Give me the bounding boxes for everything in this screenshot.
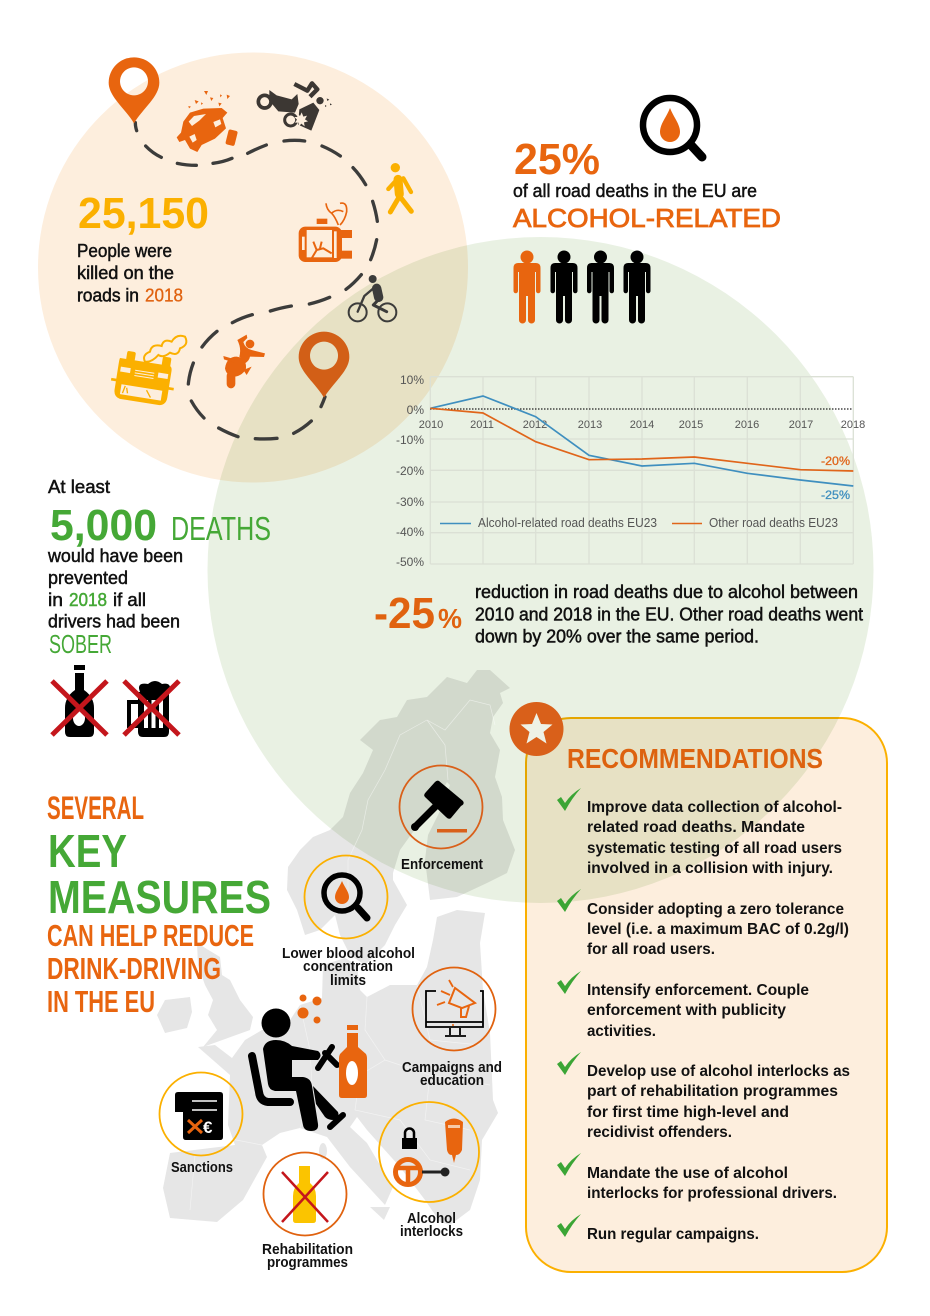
stat: -25% reduction: reduction in road deaths due to alcohol between xyxy=(475,582,858,602)
icon: steering wheel and key xyxy=(396,1160,450,1184)
measure: alcohol interlocks: Alcohol xyxy=(407,1211,456,1227)
line chart: road death trends 2010-2018: -25% xyxy=(821,488,850,502)
y axis labels: -40% xyxy=(396,525,424,539)
icon: crashed car xyxy=(177,91,238,152)
icon: monitor with megaphone xyxy=(426,980,483,1036)
measure: alcohol interlocks: interlocks xyxy=(400,1224,463,1240)
measure: campaigns and education: education xyxy=(420,1073,484,1089)
end pin xyxy=(299,332,349,398)
map borders xyxy=(190,700,495,1210)
zero line xyxy=(430,408,853,410)
smoke xyxy=(144,336,186,362)
x axis labels: 2015 xyxy=(679,419,703,431)
item: data collection: related road deaths. Mandate xyxy=(587,819,805,836)
icon: crossed-out beer mug xyxy=(124,681,179,737)
item: campaigns: Run regular campaigns. xyxy=(587,1226,759,1243)
stat: 5,000 deaths preventable: would have been xyxy=(47,545,183,566)
item: zero tolerance: level (i.e. a maximum BAC of 0.2g/l) xyxy=(587,921,849,938)
stat: 25,150 killed: 2018 xyxy=(145,286,183,306)
measure: campaigns and education xyxy=(402,968,502,1089)
stat: -25% reduction: down by 20% over the same period. xyxy=(475,626,759,646)
stat: 5,000 deaths preventable: in xyxy=(48,589,63,610)
measure: lower blood alcohol limits: concentration xyxy=(303,959,393,975)
icon: crashed motorcycle xyxy=(258,83,332,131)
x axis labels: 2018 xyxy=(841,419,865,431)
y axis labels: 10% xyxy=(400,373,424,387)
stat: 25,150 killed: 25,150 xyxy=(78,189,209,238)
stat: 25% alcohol-related xyxy=(513,135,781,233)
icon: overturned car with smoke xyxy=(108,349,178,407)
icon: magnifier with drop xyxy=(324,875,367,918)
stat: -25% reduction: -25 xyxy=(374,589,435,638)
bubbles xyxy=(298,994,322,1024)
icon: crossed-out yellow bottle xyxy=(282,1166,328,1223)
bottle xyxy=(339,1025,367,1098)
icon: overturned van xyxy=(299,203,352,262)
icon: cyclist xyxy=(349,275,396,321)
y axis labels: -10% xyxy=(396,433,424,447)
item: professional drivers: interlocks for professional drivers. xyxy=(587,1185,837,1202)
measure: rehabilitation programmes xyxy=(262,1152,353,1271)
legend xyxy=(440,516,838,530)
stat: -25% reduction: 2010 and 2018 in the EU. Other road deaths went xyxy=(475,604,863,624)
measure: lower blood alcohol limits: limits xyxy=(330,973,366,989)
measure: lower blood alcohol limits xyxy=(282,856,415,989)
stat: 5,000 deaths preventable: prevented xyxy=(48,567,128,588)
stat: 5,000 deaths preventable: At least xyxy=(48,476,110,497)
icon: gavel xyxy=(411,781,467,832)
x axis labels: 2013 xyxy=(578,419,602,431)
heading: several key measures: SEVERAL xyxy=(47,790,144,826)
item: enforcement: Intensify enforcement. Couple xyxy=(587,982,809,999)
stat: 5,000 deaths preventable: if all xyxy=(113,589,146,610)
background circle: alcohol-related xyxy=(208,237,874,903)
icon: magnifier with drop xyxy=(643,98,702,157)
heading: several key measures xyxy=(47,790,271,1019)
item: campaigns xyxy=(557,1214,759,1243)
panel: recommendations xyxy=(510,702,887,1272)
measure: sanctions xyxy=(160,1072,242,1176)
item: enforcement xyxy=(557,971,809,1040)
stat: 25,150 killed: People were xyxy=(77,241,172,261)
x axis labels: 2017 xyxy=(789,419,813,431)
stat: 25% alcohol-related: 25% xyxy=(514,135,600,184)
item: rehabilitation interlocks: Develop use of alcohol interlocks as xyxy=(587,1063,850,1080)
stat: 25% alcohol-related: ALCOHOL-RELATED xyxy=(513,203,781,233)
y axis labels: 0% xyxy=(407,403,424,417)
measure: enforcement xyxy=(400,766,483,873)
item: data collection: involved in a collision with injury. xyxy=(587,860,833,877)
legend: Other road deaths EU23 xyxy=(709,516,838,530)
heading: several key measures: IN THE EU xyxy=(47,984,155,1019)
measure: enforcement: Enforcement xyxy=(401,857,483,873)
y axis labels: -30% xyxy=(396,495,424,509)
item: enforcement: enforcement with publicity xyxy=(587,1002,786,1019)
heading: RECOMMENDATIONS xyxy=(567,743,823,774)
x axis labels: 2014 xyxy=(630,419,654,431)
illustration: seated drinker with bottle xyxy=(252,994,367,1131)
stat: 25,150 killed: killed on the xyxy=(77,263,174,283)
stat: 25% alcohol-related: of all road deaths in the EU are xyxy=(513,180,757,201)
stat: 5,000 deaths preventable: 5,000 xyxy=(50,501,157,550)
stat: 5,000 deaths preventable: 2018 xyxy=(69,589,107,610)
map of Europe xyxy=(157,670,515,1225)
heading: several key measures: KEY xyxy=(48,825,127,877)
item: professional drivers xyxy=(557,1153,837,1202)
heading: several key measures: CAN HELP REDUCE xyxy=(47,918,254,953)
y axis labels xyxy=(396,373,424,569)
y axis labels: -20% xyxy=(396,464,424,478)
dashed path xyxy=(135,123,377,439)
icon: four people, one highlighted xyxy=(514,250,650,324)
item: data collection xyxy=(557,788,842,877)
item: rehabilitation interlocks xyxy=(557,1052,850,1141)
icon: padlock xyxy=(402,1128,417,1149)
start pin xyxy=(109,57,159,123)
stat: 5,000 deaths preventable: drivers had been xyxy=(48,610,180,632)
x axis labels: 2010 xyxy=(419,419,443,431)
item: data collection: Improve data collection of alcohol- xyxy=(587,799,842,816)
item: rehabilitation interlocks: for first time high-level and xyxy=(587,1104,789,1121)
legend: Alcohol-related road deaths EU23 xyxy=(478,516,657,530)
icon: fine document: € xyxy=(203,1118,213,1137)
x axis labels: 2016 xyxy=(735,419,759,431)
stat: -25% reduction xyxy=(374,582,863,646)
stat: 5,000 deaths preventable: SOBER xyxy=(49,629,112,659)
stat: -25% reduction: % xyxy=(438,603,462,634)
stat: 5,000 deaths preventable xyxy=(47,476,271,659)
heading: several key measures: DRINK-DRIVING xyxy=(47,951,221,986)
icon: star badge xyxy=(510,702,564,756)
route: dashed road with pins and crash icons xyxy=(108,57,411,439)
blue series: alcohol-related xyxy=(430,396,853,486)
item: enforcement: activities. xyxy=(587,1023,656,1040)
item: rehabilitation interlocks: recidivist offenders. xyxy=(587,1124,732,1141)
measure: campaigns and education: Campaigns and xyxy=(402,1060,502,1076)
x axis labels: 2011 xyxy=(470,419,494,431)
end labels: -20% xyxy=(821,454,850,468)
item: rehabilitation interlocks: part of rehabilitation programmes xyxy=(587,1083,838,1100)
icon: crossed-out bottle xyxy=(52,665,107,737)
item: zero tolerance: for all road users. xyxy=(587,941,715,958)
stat: 25,150 killed xyxy=(77,189,209,306)
heading: several key measures: MEASURES xyxy=(48,871,271,923)
measure: lower blood alcohol limits: Lower blood alcohol xyxy=(282,946,415,962)
line chart: road death trends 2010-2018 xyxy=(396,373,865,569)
item: data collection: systematic testing of all road users xyxy=(587,840,842,857)
stat: 25,150 killed: roads in xyxy=(77,286,139,306)
item: professional drivers: Mandate the use of alcohol xyxy=(587,1165,788,1182)
stat: 5,000 deaths preventable: DEATHS xyxy=(171,510,271,547)
y axis labels: -50% xyxy=(396,555,424,569)
x axis labels: 2012 xyxy=(523,419,547,431)
item: zero tolerance xyxy=(557,889,849,958)
measure: rehabilitation programmes: programmes xyxy=(267,1255,348,1271)
measure: rehabilitation programmes: Rehabilitation xyxy=(262,1242,353,1258)
icon: breathalyser xyxy=(445,1118,463,1163)
item: zero tolerance: Consider adopting a zero tolerance xyxy=(587,901,844,918)
measure: alcohol interlocks xyxy=(379,1102,479,1240)
icon: pedestrian xyxy=(388,163,411,212)
background circle: road deaths xyxy=(38,52,468,482)
orange series: other deaths xyxy=(430,408,853,471)
measure: sanctions: Sanctions xyxy=(171,1160,233,1176)
x axis labels xyxy=(419,419,865,431)
icon: fallen scooter rider xyxy=(223,335,265,388)
